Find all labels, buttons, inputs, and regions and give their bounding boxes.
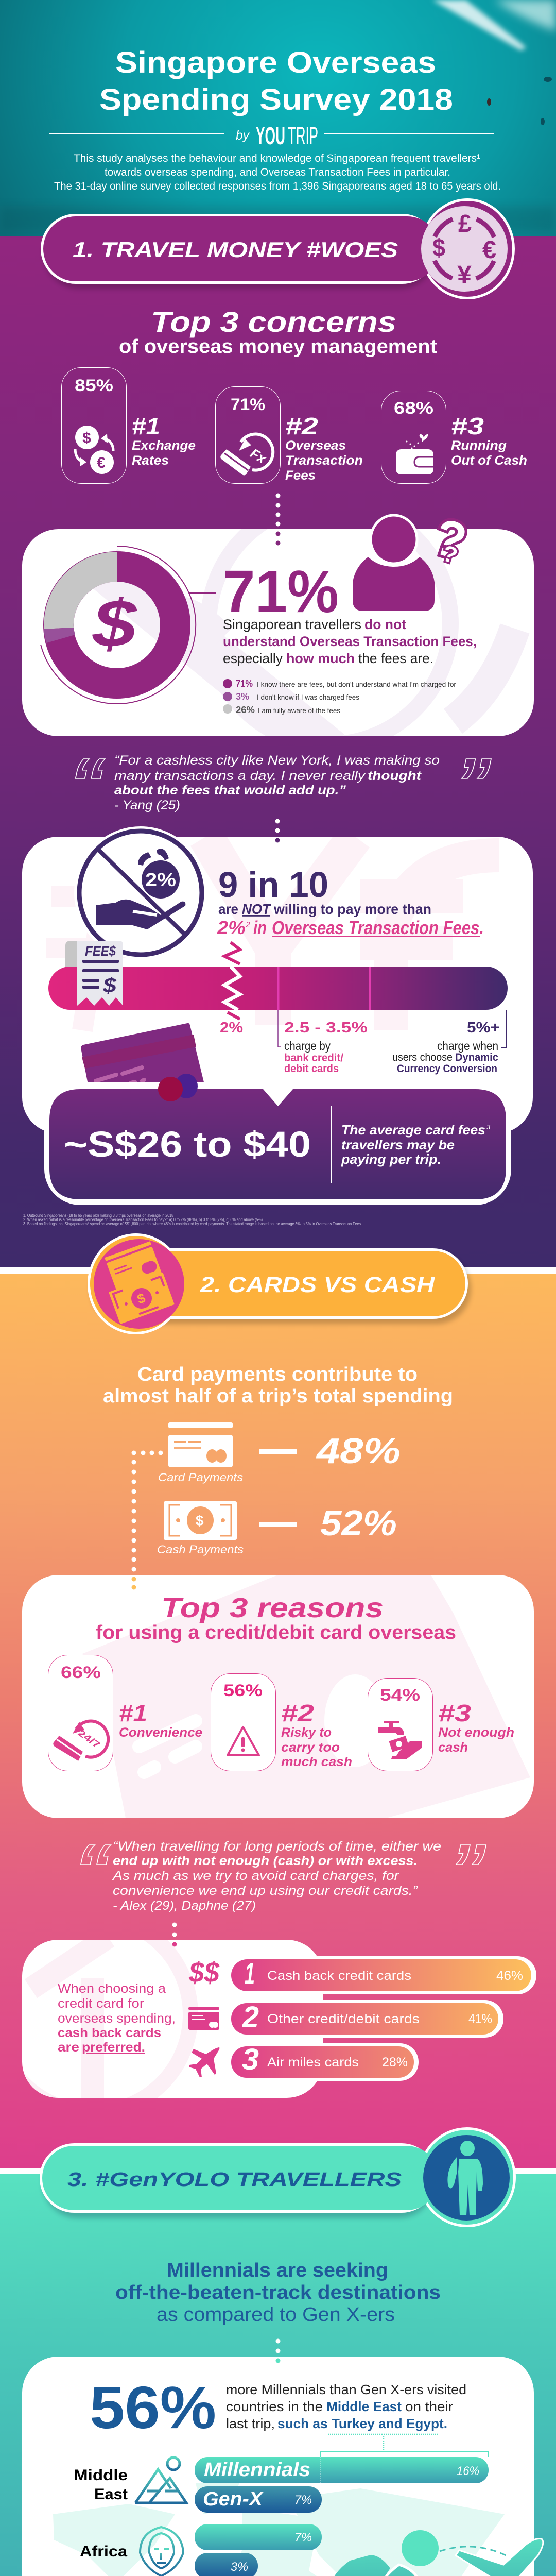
section header 1: travel money woes: 1. TRAVEL MONEY #WOES — [73, 238, 398, 262]
legend: 71% — [236, 679, 253, 689]
text: not willing to pay: are — [218, 901, 238, 917]
bar: air miles 28% — [227, 2043, 419, 2081]
byline with YouTrip logo — [49, 123, 494, 150]
heading: top 3 concerns — [119, 306, 437, 358]
labels under bar: charge by — [284, 1039, 331, 1053]
region: Middle East: Gen-X — [203, 2488, 264, 2510]
text: understanding of fees: do not — [364, 617, 406, 632]
reason 2: risky to carry cash — [211, 1673, 352, 1771]
heading: card payments contribution: almost half of a trip’s total spending — [103, 1385, 453, 1407]
heading: off the beaten track — [115, 2260, 441, 2326]
labels under bar: 5%+ — [467, 1020, 500, 1036]
quote: Alex and Daphne: end up with not enough (cash) or with excess. — [113, 1854, 418, 1868]
connector dots 1 — [276, 494, 280, 545]
hero ocean foam and surfers — [0, 0, 556, 232]
labels under bar — [220, 1020, 500, 1075]
connector dots 3 — [132, 1451, 163, 1590]
callout: fees per trip: travellers may be — [341, 1137, 455, 1153]
legend: I know there are fees, but don't understand what I'm charged for — [257, 680, 456, 688]
panel: cash back cards preferred — [22, 1940, 323, 2098]
text: not willing to pay: NOT — [242, 901, 272, 917]
icon: card — [168, 1422, 233, 1467]
icon: confused person: ? — [427, 507, 473, 571]
reason 1: convenience: Convenience — [119, 1725, 202, 1740]
intro text: This study analyses the behaviour and knowledge of Singaporean frequent travellers¹ — [74, 152, 480, 164]
icon: no more than 2 percent — [74, 826, 207, 959]
panel: cash back cards preferred: credit card for — [58, 1996, 144, 2011]
icon: tilted credit card — [81, 1023, 207, 1095]
region: Africa: Africa — [80, 2543, 127, 2560]
bar: cash back 46%: 1 — [245, 1957, 255, 1991]
section header 2: cards vs cash: 2. CARDS VS CASH — [200, 1273, 435, 1297]
concern 3: running out of cash: 68% — [394, 399, 433, 417]
stat: 56%: 56% — [90, 2374, 216, 2441]
quote: Alex and Daphne: “ — [74, 1826, 111, 1924]
reason 3: not enough cash: cash — [438, 1740, 468, 1755]
concern 3: running out of cash: Running — [451, 438, 507, 453]
text: not willing to pay — [217, 901, 484, 938]
icon: currency symbols: £ — [458, 210, 472, 238]
concern 2: overseas transaction fees — [215, 386, 363, 483]
quote: Yang: - Yang (25) — [114, 798, 180, 812]
icon: tap and hand — [378, 1721, 422, 1759]
quote: Alex and Daphne — [74, 1826, 486, 1924]
text: middle east comparison: countries in the — [226, 2399, 323, 2414]
card payments stat: 48% — [316, 1431, 401, 1471]
panel: cash back cards preferred: overseas spending, — [58, 2011, 176, 2026]
section header 1: travel money woes — [41, 198, 515, 299]
bar: air miles 28%: 3 — [242, 2043, 259, 2076]
icon: fees receipt: $ — [102, 974, 117, 997]
quote: Yang: “For a cashless city like New York, I was making so — [114, 753, 440, 768]
reason 2: risky to carry cash: 56% — [223, 1681, 263, 1700]
callout: fees per trip: The average card fees — [341, 1122, 485, 1138]
icon: fees receipt — [65, 941, 123, 1006]
heading: card payments contribution: Card payments contribute to — [137, 1364, 418, 1385]
byline with YouTrip logo: YOU — [256, 123, 285, 150]
panel: 9 in 10 transaction fees — [22, 826, 533, 1133]
icon: card with Fx arrow — [220, 434, 273, 475]
icon: card with Fx arrow: Fx — [248, 445, 270, 467]
concern 1: exchange rates: 85% — [75, 376, 113, 395]
region: Africa: 7% — [294, 2531, 312, 2545]
icon: fees receipt: FEE$ — [85, 943, 116, 959]
legend: 3% — [236, 691, 249, 702]
reason 3: not enough cash: 54% — [380, 1686, 420, 1704]
icon: currency exchange: € — [97, 454, 106, 471]
title — [99, 46, 453, 116]
byline with YouTrip logo: TRIP — [288, 123, 318, 150]
heading: off the beaten track: as compared to Gen X-ers — [157, 2304, 395, 2326]
bar: cash back 46%: 46% — [496, 1969, 523, 1983]
reason 1: convenience: #1 — [119, 1700, 147, 1726]
concern 2: overseas transaction fees: Fees — [285, 468, 316, 483]
concern 1: exchange rates — [62, 368, 196, 483]
title: Spending Survey 2018 — [99, 83, 453, 116]
reason 2: risky to carry cash: carry too — [281, 1740, 340, 1755]
icon: card and cash — [105, 1241, 175, 1324]
icon: confused person — [353, 507, 473, 611]
icon: cash note: $ — [196, 1513, 204, 1529]
text: understanding of fees — [223, 617, 477, 666]
labels under bar: 2% — [220, 1020, 243, 1036]
text: middle east comparison: Middle East — [326, 2399, 402, 2414]
panel: top 3 reasons — [22, 1575, 534, 1818]
bar: other cards 41%: 2 — [242, 2001, 259, 2034]
concern 2: overseas transaction fees: 71% — [231, 395, 265, 414]
text: middle east comparison: last trip, — [226, 2416, 275, 2431]
icon: warning triangle — [228, 1727, 259, 1755]
labels under bar: debit cards — [284, 1063, 339, 1075]
quote: Alex and Daphne: ” — [449, 1826, 486, 1924]
concern 3: running out of cash — [381, 391, 527, 483]
footnotes section 1: 1. Outbound Singaporeans (18 to 65 years old) making 3.3 trips overseas on average in 2018 — [23, 1213, 173, 1218]
text: not willing to pay: 2% — [217, 917, 246, 938]
bar: cash back 46% — [227, 1956, 536, 1994]
panel: millennial destinations chart — [22, 2357, 534, 2576]
callout: fees per trip: paying per trip. — [341, 1151, 441, 1167]
text: not willing to pay: Overseas Transaction Fees. — [272, 917, 484, 938]
quote: Yang: ” — [455, 740, 491, 838]
icon: pyramids — [135, 2458, 186, 2503]
reason 3: not enough cash: Not enough — [438, 1725, 514, 1740]
concern 2: overseas transaction fees: Overseas — [285, 438, 346, 453]
reason 3: not enough cash: #3 — [438, 1700, 472, 1726]
concern 2: overseas transaction fees: Transaction — [285, 453, 363, 468]
reason 1: convenience: 66% — [61, 1663, 101, 1682]
callout: fees per trip — [44, 1074, 511, 1205]
text: middle east comparison: more Millennials than Gen X-ers visited — [226, 2382, 466, 2397]
icon: backpacker — [447, 2141, 483, 2215]
connector dots 4 — [172, 1923, 177, 1946]
icon: currency symbols: € — [482, 236, 496, 264]
text: understanding of fees: especially — [223, 651, 283, 666]
concern 3: running out of cash: Out of Cash — [451, 453, 527, 468]
heading: off the beaten track: off-the-beaten-track destinations — [115, 2282, 441, 2303]
icon: currency exchange: $ — [82, 430, 91, 447]
footnotes section 1 — [23, 1213, 362, 1226]
callout: fees per trip: 3 — [486, 1123, 491, 1131]
quote: Yang: thought — [368, 769, 422, 783]
reason 2: risky to carry cash: #2 — [281, 1700, 315, 1726]
reason 2: risky to carry cash: Risky to — [281, 1725, 332, 1740]
bar: other cards 41%: 41% — [468, 2012, 492, 2026]
labels under bar: users choose — [392, 1052, 453, 1063]
concern 1: exchange rates: Rates — [132, 453, 169, 468]
connector dots 5 — [276, 2339, 280, 2363]
icon: card and cash: $ — [135, 1290, 148, 1307]
card payments stat — [158, 1422, 401, 1484]
intro text: towards overseas spending, and Overseas Transaction Fees in particular. — [105, 166, 450, 178]
bar: fee scale — [48, 942, 508, 1047]
icon: card 24/7 — [53, 1721, 108, 1761]
quote: Alex and Daphne: As much as we try to avoid card charges, for — [112, 1869, 400, 1883]
quote: Alex and Daphne: “When travelling for long periods of time, either we — [113, 1839, 441, 1854]
bar: air miles 28%: 28% — [382, 2055, 408, 2070]
panel: top 3 reasons: Top 3 reasons — [161, 1592, 384, 1623]
labels under bar: bank credit/ — [284, 1052, 343, 1064]
concern 1: exchange rates: #1 — [132, 413, 160, 439]
quote: Yang: many transactions a day. I never really — [114, 769, 366, 783]
icon: currency symbols: $ — [432, 234, 445, 262]
big stat 71%: 71% — [223, 558, 339, 625]
quote: Alex and Daphne: convenience we end up using our credit cards.” — [113, 1884, 419, 1898]
panel: 71 percent do not understand fees — [22, 514, 534, 736]
section header 3: GenYOLO travellers: 3. #GenYOLO TRAVELLERS — [67, 2169, 402, 2191]
text: middle east comparison — [226, 2382, 489, 2457]
panel: cash back cards preferred: preferred. — [82, 2040, 145, 2055]
text: not willing to pay: willing to pay more than — [273, 901, 431, 917]
title: Singapore Overseas — [115, 46, 436, 79]
region: Africa: 3% — [231, 2560, 248, 2574]
legend — [223, 679, 456, 715]
text: not willing to pay: in — [253, 917, 267, 938]
icon: lion — [140, 2527, 183, 2576]
icon: card — [188, 2007, 219, 2030]
text: middle east comparison: such as Turkey and Egypt. — [277, 2416, 447, 2431]
labels under bar: Currency Conversion — [397, 1063, 497, 1075]
icon: no more than 2 percent: 2% — [145, 869, 176, 890]
bar: other cards 41% — [227, 2000, 503, 2038]
icon: card 24/7: 24/7 — [76, 1727, 102, 1750]
panel: cash back cards preferred: cash back cards — [58, 2026, 161, 2040]
donut chart — [41, 546, 216, 704]
intro text — [54, 152, 501, 192]
cash payments stat: 52% — [320, 1503, 397, 1543]
icon: currency exchange — [75, 426, 114, 474]
icon: cash note — [164, 1501, 237, 1540]
cash payments stat — [157, 1501, 397, 1556]
intro text: The 31-day online survey collected responses from 1,396 Singaporeans aged 18 to 65 years old. — [54, 180, 501, 192]
legend: 26% — [236, 705, 255, 715]
bar: other cards 41%: Other credit/debit cards — [267, 2012, 420, 2026]
region: Middle East: Middle — [74, 2467, 128, 2484]
icon: dollars: $$ — [188, 1956, 220, 1988]
panel: cash back cards preferred: are — [58, 2040, 79, 2055]
panel: cash back cards preferred: When choosing a — [58, 1981, 166, 1996]
reason 3: not enough cash — [368, 1679, 514, 1771]
labels under bar: Dynamic — [455, 1052, 498, 1063]
icon: currency symbols: ¥ — [457, 261, 472, 289]
heading: top 3 concerns: of overseas money management — [119, 336, 437, 358]
icon: currency symbols — [421, 206, 508, 292]
text: middle east comparison: on their — [405, 2399, 453, 2414]
quote: Yang: about the fees that would add up.” — [114, 783, 346, 798]
bar chart: preferred card types — [188, 1956, 536, 2081]
quote: Yang — [68, 740, 491, 838]
text: understanding of fees: how much — [286, 651, 355, 666]
footnotes section 1: 3. Based on findings that Singaporeans* spend an average of S$1,800 per trip, where 48% is contributed by card payments. The stated range is based on the average 3% to 5% in Overseas Transaction Fees. — [23, 1222, 362, 1226]
bar: cash back 46%: Cash back credit cards — [267, 1969, 411, 1983]
reason 1: convenience — [48, 1655, 202, 1771]
region: Middle East: Millennials — [204, 2459, 310, 2481]
panel: top 3 reasons: for using a credit/debit card overseas — [96, 1622, 456, 1643]
quote: Yang: “ — [68, 740, 105, 838]
icon: plane — [189, 2047, 219, 2077]
world map backdrop — [53, 2478, 505, 2576]
region: Africa — [80, 2524, 322, 2576]
section header 2: cards vs cash — [88, 1233, 471, 1334]
labels under bar: charge when — [437, 1039, 498, 1053]
byline with YouTrip logo: by — [236, 128, 250, 143]
illustration: backpacker with plane — [301, 2530, 543, 2576]
text: not willing to pay: 2 — [245, 921, 250, 929]
concern 3: running out of cash: #3 — [451, 413, 484, 439]
heading: card payments contribution — [103, 1364, 453, 1407]
icon: confused person: ? — [439, 540, 461, 569]
reason 2: risky to carry cash: much cash — [281, 1755, 352, 1769]
section header 3: GenYOLO travellers — [40, 2127, 516, 2227]
cash payments stat: Cash Payments — [157, 1543, 244, 1556]
card payments stat: Card Payments — [158, 1471, 243, 1484]
icon: empty wallet — [396, 434, 433, 474]
callout: fees per trip: ~S$26 to $40 — [64, 1124, 311, 1164]
region: Middle East: East — [94, 2486, 128, 2503]
heading: off the beaten track: Millennials are seeking — [167, 2260, 388, 2281]
text: understanding of fees: the fees are. — [358, 651, 433, 666]
heading: top 3 concerns: Top 3 concerns — [151, 306, 396, 338]
stat: 9 in 10: 9 in 10 — [218, 865, 328, 905]
text: understanding of fees: Singaporean travellers — [223, 617, 361, 632]
quote: Alex and Daphne: - Alex (29), Daphne (27) — [113, 1899, 256, 1913]
region: Middle East — [74, 2457, 489, 2513]
region: Middle East: 16% — [457, 2464, 479, 2478]
labels under bar: 2.5 - 3.5% — [284, 1020, 368, 1036]
connector dots 2 — [275, 819, 280, 843]
footnotes section 1: 2. When asked ‘What is a reasonable percentage of Overseas Transaction Fees to pay?’: a) 0 to 2% (88%), b) 3 to 5% (7%), c) 6% and above (5%) — [23, 1217, 263, 1222]
concern 2: overseas transaction fees: #2 — [285, 413, 319, 439]
concern 1: exchange rates: Exchange — [132, 438, 196, 453]
region: Middle East: 7% — [294, 2493, 312, 2507]
text: understanding of fees: understand Overseas Transaction Fees, — [223, 634, 477, 649]
legend: I don't know if I was charged fees — [257, 693, 359, 701]
legend: I am fully aware of the fees — [258, 706, 340, 715]
bar: air miles 28%: Air miles cards — [267, 2055, 359, 2070]
donut chart: $ — [92, 586, 137, 661]
